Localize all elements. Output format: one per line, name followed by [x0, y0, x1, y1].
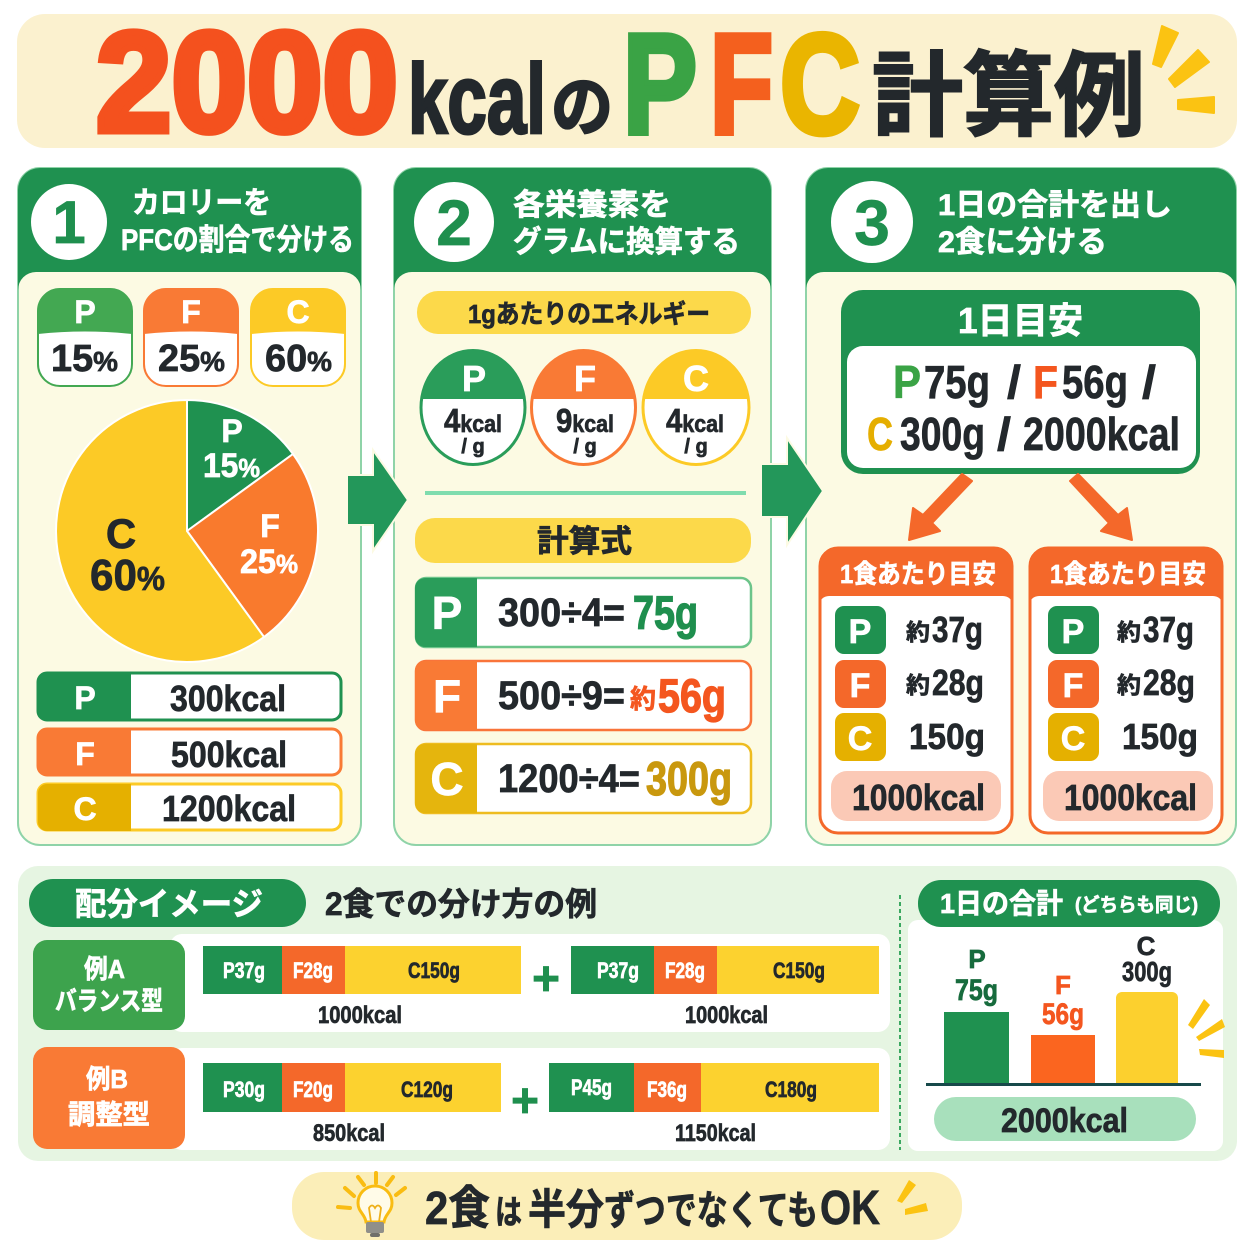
icon: light bulb: [338, 1173, 405, 1237]
example B: 850kcal: [313, 1120, 385, 1147]
ratio cards: 15%: [51, 338, 118, 380]
daily target box: 2000kcal: [1023, 408, 1180, 460]
daily target box: /: [1142, 356, 1156, 408]
energy ovals: / g: [461, 436, 485, 458]
example A: バランス型: [55, 986, 163, 1016]
daily target box: 56g: [1062, 356, 1128, 408]
energy ovals: / g: [684, 436, 708, 458]
footer callout: ずつでなくても: [604, 1189, 818, 1233]
daily total chart: 56g: [1042, 998, 1084, 1031]
example A: C150g: [773, 958, 825, 983]
energy ovals: [421, 350, 749, 464]
kcal bars: [38, 673, 341, 831]
daily total chart: 75g: [955, 974, 998, 1007]
example A: 例A: [84, 954, 125, 984]
ratio cards: 25%: [158, 338, 225, 380]
ratio cards: C: [286, 294, 310, 330]
formula heading: 計算式: [537, 524, 632, 559]
per-meal card left: 約: [906, 672, 930, 698]
energy ovals: 4kcal: [666, 402, 724, 439]
formula rows: 300÷4=: [498, 591, 625, 635]
split arrows: [909, 474, 1132, 540]
panel: step 1: カロリーを: [132, 187, 271, 220]
panel: step 1: PFCの割合で分ける: [121, 224, 354, 257]
energy per gram heading: 1gあたりのエネルギー: [468, 299, 710, 329]
pie chart: 60%: [90, 551, 165, 600]
title banner: C: [780, 5, 860, 164]
kcal bars: P: [74, 680, 96, 716]
example B: 1150kcal: [675, 1120, 756, 1147]
formula rows: P: [432, 587, 462, 639]
per-meal card left: 150g: [909, 716, 985, 757]
formula rows: F: [433, 670, 461, 722]
panel: step 2: [394, 168, 771, 845]
footer callout: [292, 1172, 962, 1240]
pie chart: 15%: [203, 447, 260, 485]
panel: distribution image: [18, 866, 1237, 1161]
per-meal card right: 1000kcal: [1064, 777, 1197, 818]
formula rows: [415, 578, 751, 813]
pie chart: 25%: [240, 543, 298, 581]
formula heading: [415, 518, 751, 563]
per-meal card left: 28g: [932, 662, 984, 703]
kcal bars: 300kcal: [170, 678, 286, 719]
daily target box: C: [867, 408, 893, 460]
panel: step 2: グラムに換算する: [513, 226, 740, 259]
formula rows: 500÷9=: [498, 674, 625, 718]
example B: 例B: [86, 1064, 128, 1094]
daily total chart: 1日の合計: [940, 888, 1063, 919]
panel: step 1: 1: [52, 189, 86, 256]
daily target box: P: [893, 356, 921, 408]
example A: 1000kcal: [318, 1002, 402, 1029]
formula rows: C: [430, 753, 464, 805]
formula rows: 75g: [633, 586, 698, 639]
title banner: F: [710, 5, 773, 164]
kcal bars: F: [75, 736, 95, 772]
title banner: 2000: [96, 3, 398, 162]
example A: 1000kcal: [685, 1002, 768, 1029]
per-meal card left: P: [849, 613, 871, 651]
example B: 調整型: [68, 1100, 150, 1130]
distribution heading: [29, 879, 597, 927]
per-meal card right: 28g: [1143, 662, 1195, 703]
arrow: step 2 to 3: [761, 438, 823, 545]
per-meal card right: F: [1063, 667, 1083, 705]
panel: step 3: 1日の合計を出し: [938, 189, 1172, 222]
daily total chart: P: [968, 944, 986, 974]
pie chart: [56, 400, 318, 662]
energy ovals: 4kcal: [444, 402, 502, 439]
daily total chart: [908, 880, 1225, 1151]
per-meal card left: F: [850, 667, 870, 705]
per-meal card right: 37g: [1143, 609, 1194, 650]
panel: step 3: 2食に分ける: [938, 226, 1107, 259]
distribution heading: 2食での分け方の例: [325, 886, 597, 922]
energy ovals: C: [683, 358, 709, 399]
example A: F28g: [665, 958, 705, 983]
pie chart: C: [106, 510, 136, 557]
title banner: の: [551, 70, 613, 144]
per-meal card right: 150g: [1122, 716, 1198, 757]
per-meal card right: 約: [1117, 672, 1141, 698]
title banner: [17, 3, 1237, 164]
energy ovals: P: [462, 358, 486, 399]
daily total chart: 300g: [1122, 956, 1172, 987]
formula rows: 300g: [646, 752, 732, 805]
example B: [33, 1047, 890, 1150]
daily target box: /: [997, 408, 1011, 460]
daily target box: 1日目安: [958, 300, 1083, 341]
panel: step 1: [18, 168, 361, 845]
formula rows: 約: [630, 684, 656, 714]
example B: C120g: [401, 1077, 453, 1102]
energy ovals: F: [574, 358, 596, 399]
kcal bars: 1200kcal: [162, 788, 296, 829]
daily total chart: (どちらも同じ): [1075, 894, 1198, 916]
example A: +: [532, 953, 560, 1006]
panel: step 2: 2: [436, 187, 472, 259]
per-meal card right: P: [1062, 613, 1084, 651]
example B: P30g: [223, 1077, 265, 1102]
example B: C180g: [765, 1077, 817, 1102]
example A: [33, 934, 890, 1032]
example B: P45g: [571, 1075, 612, 1100]
panel: step 2: 各栄養素を: [513, 189, 671, 222]
example A: P37g: [597, 958, 639, 983]
daily target box: F: [1033, 356, 1058, 408]
formula rows: 1200÷4=: [498, 757, 640, 801]
energy ovals: / g: [573, 436, 597, 458]
footer callout: は: [495, 1194, 522, 1232]
pie chart: P: [221, 413, 243, 449]
example B: F36g: [647, 1077, 687, 1102]
daily target box: /: [1007, 356, 1021, 408]
kcal bars: C: [73, 791, 97, 827]
kcal bars: 500kcal: [171, 734, 287, 775]
daily target box: 300g: [900, 408, 985, 460]
ratio cards: 60%: [265, 338, 332, 380]
arrow: step 1 to 2: [347, 450, 408, 551]
ratio cards: P: [74, 294, 96, 330]
per-meal card left: 1食あたり目安: [840, 559, 996, 589]
ratio cards: F: [181, 294, 201, 330]
footer callout: 2食: [425, 1182, 490, 1234]
daily target box: 75g: [924, 356, 990, 408]
example A: F28g: [293, 958, 333, 983]
panel: step 3: 3: [854, 187, 890, 259]
energy per gram heading: [417, 291, 751, 334]
panel: step 3: [806, 168, 1236, 845]
per-meal card right: 1食あたり目安: [1050, 559, 1206, 589]
example B: F20g: [293, 1077, 333, 1102]
per-meal card right: [1029, 547, 1223, 833]
ratio cards: [38, 289, 345, 386]
daily total chart: F: [1055, 970, 1071, 1000]
per-meal card right: 約: [1117, 619, 1141, 645]
title banner: P: [623, 5, 697, 164]
per-meal card left: [819, 547, 1013, 833]
formula rows: 56g: [658, 669, 726, 722]
energy ovals: 9kcal: [556, 402, 614, 439]
daily total chart: C: [1137, 931, 1156, 961]
per-meal card left: C: [848, 720, 872, 758]
per-meal card left: 約: [906, 619, 930, 645]
distribution heading: 配分イメージ: [75, 886, 263, 922]
per-meal card left: 1000kcal: [852, 777, 985, 818]
title banner: 計算例: [872, 46, 1145, 148]
daily total chart: 2000kcal: [1001, 1102, 1128, 1140]
daily target box: [841, 290, 1200, 474]
pie chart: F: [260, 508, 280, 544]
per-meal card right: C: [1061, 720, 1085, 758]
per-meal card left: 37g: [932, 609, 983, 650]
footer callout: 半分: [528, 1186, 604, 1233]
example A: C150g: [408, 958, 460, 983]
example B: +: [511, 1075, 539, 1128]
footer callout: OK: [820, 1182, 880, 1235]
example A: P37g: [223, 958, 265, 983]
title banner: kcal: [408, 44, 546, 154]
